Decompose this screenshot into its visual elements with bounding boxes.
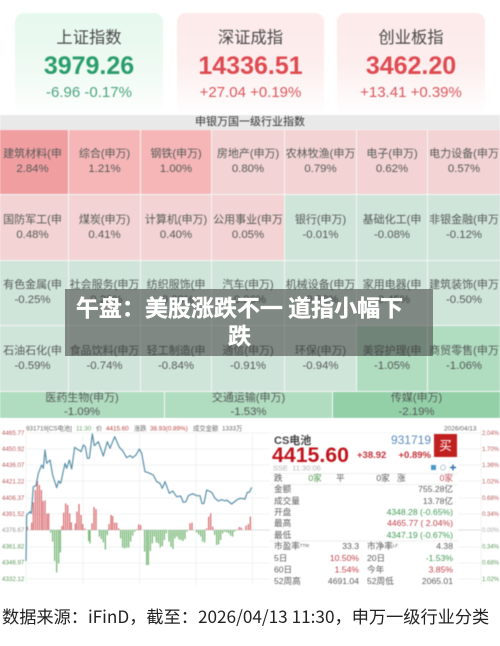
card: Shanghai index: -6.96 -0.17%: [46, 84, 132, 101]
quote statistics: 金额: [274, 483, 292, 494]
panel: industry heat map: 0.80%: [232, 163, 264, 175]
quote statistics: 开盘: [274, 506, 292, 517]
quote statistics: 2065.01: [422, 576, 453, 586]
quote statistics: 跌: [274, 473, 283, 483]
right axis labels: 0.00%: [482, 528, 500, 534]
chart header line: 11:30: [76, 426, 92, 432]
quote statistics: 市盈率: [274, 541, 300, 551]
chart: CS battery intraday quote: [2, 418, 500, 586]
panel: industry heat map: 纺织服饰(申: [147, 279, 205, 291]
quote statistics: 4691.04: [328, 576, 359, 586]
icons: toolbar: [431, 464, 456, 470]
right axis labels: [482, 431, 500, 583]
quote statistics: 0家: [376, 472, 390, 483]
panel: industry heat map: 有色金属(申: [3, 279, 62, 291]
panel: industry heat map: -0.28%: [86, 294, 123, 306]
panel: industry heat map: -0.38%: [302, 294, 339, 306]
panel: industry heat map: 环保(申万): [295, 344, 346, 356]
quote panel: [270, 433, 458, 586]
quote statistics: 13.78亿: [423, 495, 453, 506]
panel: industry heat map: 钢铁(申万): [150, 148, 202, 160]
heading: Shenwan industry index band: 申银万国一级行业指数: [195, 116, 305, 128]
panel: industry heat map: 银行(申万): [295, 214, 346, 226]
panel: industry heat map: 国防军工(申: [3, 214, 62, 226]
panel: industry heat map: 基础化工(申: [363, 214, 421, 226]
left axis labels: 4332.12: [2, 576, 25, 583]
card: Shenzhen index: [177, 13, 324, 115]
panel: industry heat map: 综合(申万): [79, 148, 130, 160]
card: ChiNext index: [337, 13, 485, 115]
panel: industry heat map: -0.45%: [374, 294, 410, 306]
panel: industry heat map: -2.19%: [398, 406, 435, 418]
panel: industry heat map: -0.33%: [158, 294, 194, 306]
chart header line: 1333万: [222, 424, 242, 432]
left axis labels: 4361.82: [2, 544, 25, 550]
panel: industry heat map: 家用电器(申: [363, 279, 421, 291]
right axis labels: 0.68%: [482, 496, 500, 502]
chart header line: 涨跌: [134, 424, 147, 432]
quote statistics: 0家: [308, 472, 322, 483]
right axis labels: 2.04%: [482, 431, 500, 437]
panel: industry heat map: -1.05%: [374, 360, 410, 372]
panel: industry heat map: 社会服务(申万: [70, 279, 139, 291]
panel: industry heat map: 美容护理(申: [363, 344, 421, 356]
quote statistics: 3.85%: [429, 564, 453, 574]
panel: industry heat map: 公用事业(申万: [213, 214, 283, 226]
panel: industry heat map: 0.57%: [448, 163, 480, 175]
panel: industry heat map: 房地产(申万): [217, 148, 279, 160]
panel: industry heat map: 0.41%: [88, 228, 121, 240]
quote panel: CS电池: [274, 433, 311, 447]
left axis labels: 4465.77: [2, 430, 25, 437]
panel: industry heat map: 0.40%: [160, 228, 192, 240]
quote statistics: -1.53%: [426, 553, 453, 563]
panel: industry heat map: 建筑装饰(申万: [429, 279, 499, 291]
chart header line: 931719[CS电池]: [26, 424, 72, 432]
panel: industry heat map: 非银金融(申万: [429, 214, 499, 226]
card: Shenzhen index: 深证成指: [218, 24, 283, 48]
panel: industry heat map: 0.48%: [16, 228, 49, 240]
panel: industry heat map: -1.53%: [230, 406, 267, 418]
panel: industry heat map: 通信(申万): [222, 344, 274, 356]
panel: industry heat map: -0.12%: [446, 228, 482, 240]
panel: industry heat map: -0.50%: [446, 294, 482, 306]
quote statistics: 4.38: [436, 541, 453, 551]
quote statistics: 4465.77 ( 2.04%): [387, 518, 453, 528]
card: Shanghai index: [15, 13, 163, 115]
panel: industry heat map: -1.06%: [446, 360, 482, 372]
quote statistics: 最低: [274, 529, 292, 540]
quote statistics: 平: [336, 473, 345, 483]
panel: industry heat map: 商贸零售(申万: [429, 344, 499, 356]
quote statistics: [270, 472, 458, 586]
quote statistics: 20日: [367, 553, 385, 563]
panel: industry heat map: 轻工制造(申: [147, 344, 205, 356]
quote statistics: 5日: [274, 553, 287, 563]
panel: industry heat map: -0.84%: [158, 360, 194, 372]
panel: industry heat map: 1.00%: [160, 163, 192, 175]
card: Shanghai index: 上证指数: [56, 24, 122, 48]
quote statistics: 今年: [367, 564, 385, 574]
quote statistics: TTM: [300, 543, 309, 548]
left axis labels: 4346.97: [2, 560, 25, 566]
quote statistics: 4347.19 (-0.67%): [387, 530, 453, 540]
panel: industry heat map: -0.08%: [374, 228, 410, 240]
chart header line: 4415.60: [106, 426, 129, 432]
panel: industry heat map: 2.84%: [16, 163, 49, 175]
right axis labels: 0.34%: [482, 512, 500, 518]
right axis labels: 1.36%: [482, 463, 500, 469]
panel: industry heat map: 电力设备(申万: [429, 148, 499, 160]
panel: industry heat map: 农林牧渔(申万: [286, 148, 355, 160]
panel: industry heat map: -0.91%: [230, 360, 266, 372]
chart header line: 成交金额: [193, 424, 219, 432]
card: ChiNext index: +13.41 +0.39%: [360, 84, 462, 101]
card: ChiNext index: 3462.20: [366, 52, 456, 80]
right axis labels: 0.34%: [482, 544, 500, 550]
quote statistics: LF: [393, 543, 398, 548]
panel: industry heat map: 机械设备(申万: [286, 279, 355, 291]
chart header line: 38.93(0.89%): [150, 426, 188, 432]
panel: industry heat map: 0.05%: [232, 228, 264, 240]
card: Shanghai index: 3979.26: [44, 52, 134, 80]
panel: industry heat map: 建筑材料(申: [3, 148, 62, 160]
panel: industry heat map: 煤炭(申万): [79, 214, 130, 226]
left axis labels: 4450.92: [2, 446, 25, 453]
quote statistics: 10.50%: [330, 553, 359, 563]
panel: industry heat map: -0.94%: [302, 360, 339, 372]
panel: industry heat map: -0.25%: [14, 294, 51, 306]
panel: industry heat map: 石油石化(申: [3, 344, 62, 356]
panel: industry heat map: 汽车(申万): [222, 279, 274, 291]
panel: industry heat map: -0.01%: [302, 228, 339, 240]
left axis labels: 4376.67: [2, 527, 25, 534]
card: Shenzhen index: 14336.51: [198, 52, 303, 80]
panel: industry heat map: 1.21%: [88, 163, 121, 175]
title: 跌: [228, 317, 251, 351]
panel: industry heat map: 食品饮料(申万: [70, 344, 139, 356]
quote statistics: 成交量: [274, 495, 300, 506]
quote panel: +0.89%: [398, 450, 432, 461]
quote panel: +38.92: [357, 450, 386, 461]
card: Shenzhen index: +27.04 +0.19%: [200, 84, 301, 101]
panel: industry heat map: -0.59%: [14, 360, 51, 372]
panel: industry heat map: 0.62%: [376, 163, 408, 175]
panel: industry heat map: 计算机(申万): [145, 214, 207, 226]
panel: industry heat map: -0.74%: [86, 360, 123, 372]
panel: industry heat map: -1.09%: [64, 406, 100, 418]
date label: 2026/04/13: [444, 426, 477, 432]
quote statistics: 4348.28 (-0.65%): [387, 507, 453, 517]
quote statistics: 最高: [274, 517, 292, 528]
panel: industry heat map: [0, 130, 500, 418]
quote statistics: 33.3: [342, 541, 359, 551]
title: 午盘：美股涨跌不一 道指小幅下: [76, 289, 403, 323]
panel: industry heat map: 电子(申万): [366, 148, 418, 160]
text block: data source footer: 数据来源：iFinD，截至：2026/04/13 11:30，申万一级行业分类: [2, 603, 489, 628]
left axis labels: 4436.07: [2, 462, 25, 469]
title: [76, 289, 403, 351]
icon: buy button: [434, 434, 457, 457]
left axis labels: [2, 430, 25, 583]
right axis labels: 0.68%: [482, 560, 500, 566]
panel: industry heat map: -0.36%: [230, 294, 266, 306]
icon: buy button: 买: [439, 439, 452, 453]
quote statistics: 52周高: [274, 575, 301, 586]
chart header line: 价: [96, 426, 103, 432]
left axis labels: 4406.37: [2, 495, 25, 502]
quote panel: 931719: [391, 433, 431, 447]
chart header line: [26, 424, 242, 432]
right axis labels: 1.02%: [482, 480, 500, 486]
quote statistics: 755.28亿: [418, 483, 453, 494]
quote statistics: 涨: [397, 473, 406, 483]
quote panel: SSE 11:30:06: [273, 464, 321, 472]
heading: Shenwan industry index band: [0, 115, 500, 130]
panel: index cards: [15, 12, 485, 101]
quote statistics: 市净率: [367, 541, 393, 551]
quote statistics: 1.54%: [335, 564, 359, 574]
left axis labels: 4421.22: [2, 478, 25, 486]
right axis labels: 1.70%: [482, 447, 500, 453]
title overlay: [65, 289, 433, 356]
quote statistics: 0家: [440, 472, 453, 483]
quote statistics: 52周低: [367, 575, 394, 586]
quote panel: 4415.60: [272, 443, 349, 467]
volume bars and price line: [26, 434, 252, 572]
quote statistics: 60日: [274, 564, 292, 574]
card: ChiNext index: 创业板指: [378, 24, 444, 48]
right axis labels: 1.02%: [482, 577, 500, 583]
panel: industry heat map: 0.79%: [304, 163, 337, 175]
left axis labels: 4391.52: [2, 511, 25, 518]
